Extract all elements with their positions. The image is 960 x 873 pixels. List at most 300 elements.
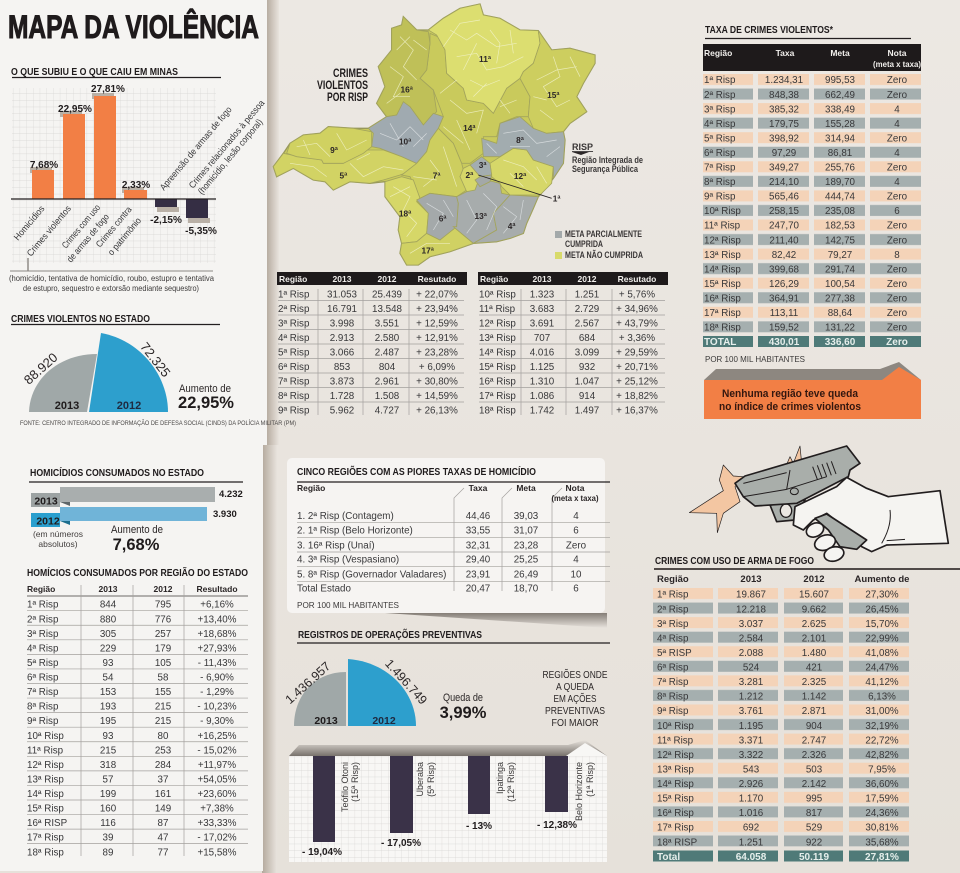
table: taxa de crimes violentos: 113,11 xyxy=(770,308,798,319)
panel: cinco regiões com as piores taxas: 39,03 xyxy=(514,511,539,522)
table: crimes violentos 10ª a 18ª Risp: 2013 xyxy=(533,274,552,284)
table: crimes com uso de arma de fogo: 3ª Risp xyxy=(657,619,689,630)
bar chart: regiões com maior queda: (5ª Risp) xyxy=(426,762,436,797)
panel: cinco regiões com as piores taxas: 23,28 xyxy=(514,540,539,551)
table: crimes violentos 1ª a 9ª Risp xyxy=(277,272,467,417)
table: crimes violentos 10ª a 18ª Risp: 2.729 xyxy=(575,304,599,315)
bar chart: homicídios consumados: 2013 xyxy=(34,496,58,508)
heading: crimes violentos no estado: CRIMES VIOLENTOS NO ESTADO xyxy=(11,313,150,325)
pie chart: operações preventivas: 2013 xyxy=(314,715,338,727)
map title: POR RISP xyxy=(327,92,368,104)
callout: queda 3,99%: Queda de xyxy=(443,692,483,704)
table: taxa de crimes violentos: 291,74 xyxy=(825,264,856,275)
bar chart: homicídios consumados: 3.930 xyxy=(213,509,237,520)
table: homicídios por região: - 9,30% xyxy=(200,716,234,727)
panel: cinco regiões com as piores taxas: Meta xyxy=(516,483,536,493)
table: crimes violentos 1ª a 9ª Risp: + 30,80% xyxy=(416,377,458,388)
table: crimes violentos 10ª a 18ª Risp: 1.086 xyxy=(530,391,555,402)
table: taxa de crimes violentos: Zero xyxy=(887,75,908,86)
table: crimes com uso de arma de fogo: 1.170 xyxy=(739,794,764,805)
table: crimes violentos 10ª a 18ª Risp: 4.016 xyxy=(530,348,555,359)
table: crimes com uso de arma de fogo: 9ª Risp xyxy=(657,706,689,717)
table: crimes com uso de arma de fogo: 421 xyxy=(806,662,822,674)
panel: cinco regiões com as piores taxas: 2. 1ª Risp (Belo Horizonte) xyxy=(297,525,413,536)
table: taxa de crimes violentos: 8ª Risp xyxy=(704,177,736,188)
table: crimes com uso de arma de fogo: 50.119 xyxy=(799,852,829,863)
table: crimes violentos 1ª a 9ª Risp: + 26,13% xyxy=(416,406,458,417)
table: crimes com uso de arma de fogo: 15.607 xyxy=(799,590,829,601)
table: taxa de crimes violentos: Zero xyxy=(887,162,908,174)
table: crimes com uso de arma de fogo: 11ª Risp xyxy=(657,735,694,746)
table: taxa de crimes violentos: 247,70 xyxy=(769,221,800,232)
table: taxa de crimes violentos: 430,01 xyxy=(769,337,800,348)
bar chart: o que subiu e o que caiu: Crimes relacionados à pessoa xyxy=(187,97,267,190)
table: crimes violentos 10ª a 18ª Risp: Região xyxy=(480,274,508,284)
table: crimes violentos 1ª a 9ª Risp: + 23,94% xyxy=(416,304,458,315)
table: crimes violentos 10ª a 18ª Risp: + 5,76% xyxy=(619,290,655,301)
map: region labels: 16ª xyxy=(400,84,414,94)
table: crimes violentos 10ª a 18ª Risp: 11ª Risp xyxy=(479,304,516,315)
table: taxa de crimes violentos: 100,54 xyxy=(825,279,856,290)
table: crimes violentos 1ª a 9ª Risp: 2ª Risp xyxy=(278,304,310,315)
table: homicídios por região: 116 xyxy=(100,818,116,829)
table: crimes com uso de arma de fogo: 35,68% xyxy=(865,837,899,848)
panel: cinco regiões com as piores taxas: 6 xyxy=(573,584,579,595)
table: crimes com uso de arma de fogo: 3.322 xyxy=(739,750,763,761)
table: taxa de crimes violentos: Zero xyxy=(887,279,908,290)
map: municipal boundary texture xyxy=(290,20,580,253)
panel: cinco regiões com as piores taxas: 29,40 xyxy=(466,555,491,566)
pie chart: crimes violentos: 2013 xyxy=(55,400,79,412)
table: homicídios por região: 39 xyxy=(103,833,113,844)
note: em números absolutos xyxy=(33,529,83,549)
table: homicídios por região: 153 xyxy=(100,687,117,698)
table: homicídios por região: 54 xyxy=(103,672,114,684)
table: homicídios por região: 6ª Risp xyxy=(27,672,59,684)
text: regiões onde a queda foi maior: A QUEDA xyxy=(556,681,594,693)
table: homicídios por região: +7,38% xyxy=(200,804,234,815)
map: region labels xyxy=(330,54,561,256)
bar chart: o que subiu e o que caiu: Apreensão de armas de fogo xyxy=(158,105,234,192)
table: taxa de crimes violentos: 12ª Risp xyxy=(704,235,741,246)
table: taxa de crimes violentos: 2ª Risp xyxy=(704,90,736,101)
panel: cinco regiões com as piores taxas: POR 100 MIL HABITANTES xyxy=(297,600,399,610)
table: taxa de crimes violentos: 662,49 xyxy=(825,90,855,101)
bar chart: regiões com maior queda: - 19,04% xyxy=(302,847,342,858)
table: crimes com uso de arma de fogo: 30,81% xyxy=(865,823,899,834)
bar chart: regiões com maior queda: (15ª Risp) xyxy=(350,762,360,802)
map: region labels: 7ª xyxy=(433,171,441,181)
table: taxa de crimes violentos: 349,27 xyxy=(769,162,799,174)
table: crimes violentos 10ª a 18ª Risp: 932 xyxy=(579,362,595,373)
table: taxa de crimes violentos: 565,46 xyxy=(769,192,800,203)
table: crimes violentos 10ª a 18ª Risp: 15ª Risp xyxy=(479,362,516,373)
table: taxa de crimes violentos: 14ª Risp xyxy=(704,264,741,275)
legend: meta: META PARCIALMENTE xyxy=(565,229,642,239)
table: crimes violentos 10ª a 18ª Risp: + 16,37% xyxy=(616,406,658,417)
table: homicídios por região: 179 xyxy=(155,643,171,654)
table: crimes com uso de arma de fogo: 9.662 xyxy=(802,604,826,615)
table: taxa de crimes violentos xyxy=(703,44,921,348)
table: crimes violentos 1ª a 9ª Risp: 853 xyxy=(334,362,351,373)
map: region labels: 3ª xyxy=(479,160,487,170)
bar chart: o que subiu e o que caiu xyxy=(10,84,267,271)
table: taxa de crimes violentos: 155,28 xyxy=(825,119,856,130)
table: homicídios por região: 47 xyxy=(158,833,168,844)
table: homicídios por região: 37 xyxy=(158,774,168,785)
table: crimes com uso de arma de fogo: 7,95% xyxy=(868,764,896,775)
callout: aumento 22,95% xyxy=(178,383,234,412)
table: crimes com uso de arma de fogo: 12.218 xyxy=(736,604,767,615)
map: region labels: 15ª xyxy=(547,90,560,100)
pie chart: operações preventivas xyxy=(283,657,430,727)
table: crimes violentos 10ª a 18ª Risp: 3.691 xyxy=(530,319,554,330)
table: taxa de crimes violentos: 9ª Risp xyxy=(704,192,736,203)
panel: cinco regiões com as piores taxas: CINCO REGIÕES COM AS PIORES TAXAS DE HOMICÍDIO xyxy=(297,465,536,478)
table: crimes com uso de arma de fogo: 6,13% xyxy=(868,692,896,703)
table: taxa de crimes violentos: 88,64 xyxy=(828,308,853,319)
table: crimes violentos 10ª a 18ª Risp: 13ª Risp xyxy=(479,333,516,344)
table: crimes violentos 10ª a 18ª Risp: 707 xyxy=(534,333,550,344)
map: region labels: 13ª xyxy=(474,211,488,221)
table: crimes violentos 10ª a 18ª Risp: 12ª Risp xyxy=(479,319,516,330)
bar chart: regiões com maior queda: - 17,05% xyxy=(381,838,421,849)
map: region labels: 10ª xyxy=(399,137,412,147)
table: taxa de crimes violentos: 1.234,31 xyxy=(765,75,803,86)
table: taxa de crimes violentos: 399,68 xyxy=(769,264,800,275)
legend: RISP definition xyxy=(572,142,643,174)
table: taxa de crimes violentos: 189,70 xyxy=(825,177,856,188)
table: taxa de crimes violentos: 214,10 xyxy=(769,177,800,188)
map: region labels: 11ª xyxy=(479,54,492,64)
panel: cinco regiões com as piores taxas: 26,49 xyxy=(514,569,538,580)
bar chart: o que subiu e o que caiu: 7,68% xyxy=(30,160,58,171)
panel: cinco regiões com as piores taxas: 10 xyxy=(571,569,582,580)
map: region labels: 4ª xyxy=(508,221,516,231)
table: crimes com uso de arma de fogo: 22,72% xyxy=(865,735,899,746)
panel: cinco regiões com as piores taxas: 5. 8ª Risp (Governador Valadares) xyxy=(297,569,446,580)
table: crimes violentos 10ª a 18ª Risp: 1.125 xyxy=(530,362,555,373)
table: homicídios por região: 229 xyxy=(100,643,116,654)
bar chart: o que subiu e o que caiu: Homicídios xyxy=(12,203,47,242)
table: taxa de crimes violentos: Meta xyxy=(830,48,850,58)
table: homicídios por região: 284 xyxy=(155,760,172,771)
table: crimes com uso de arma de fogo: 1.142 xyxy=(802,692,826,703)
panel: cinco regiões com as piores taxas: 33,55 xyxy=(466,525,491,536)
legend: RISP definition: RISP xyxy=(572,142,593,152)
table: taxa de crimes violentos: 4 xyxy=(894,104,900,115)
bar chart: o que subiu e o que caiu: Crimes com uso xyxy=(60,202,102,250)
table: taxa de crimes violentos: Zero xyxy=(887,308,908,319)
table: crimes com uso de arma de fogo: 2.625 xyxy=(802,619,827,630)
table: taxa de crimes violentos: 4 xyxy=(894,177,900,188)
table: homicídios por região: 199 xyxy=(100,789,116,800)
table: taxa de crimes violentos: 336,60 xyxy=(825,337,856,348)
table: taxa de crimes violentos: (meta x taxa) xyxy=(873,59,921,69)
table: crimes com uso de arma de fogo: 1.195 xyxy=(739,721,764,732)
table: homicídios por região: 5ª Risp xyxy=(27,658,59,669)
table: crimes violentos 1ª a 9ª Risp: 6ª Risp xyxy=(278,362,310,373)
table: crimes violentos 10ª a 18ª Risp: 684 xyxy=(579,333,596,344)
table: homicídios por região: - 10,23% xyxy=(197,702,237,713)
table: crimes com uso de arma de fogo: 2.142 xyxy=(802,779,826,790)
table: crimes violentos 1ª a 9ª Risp: + 12,59% xyxy=(416,319,458,330)
table: homicídios por região: +33,33% xyxy=(198,818,237,829)
table: crimes violentos 10ª a 18ª Risp: 18ª Risp xyxy=(479,406,516,417)
table: crimes violentos 10ª a 18ª Risp: + 34,96% xyxy=(616,304,658,315)
table: homicídios por região: 318 xyxy=(100,760,117,771)
table: crimes com uso de arma de fogo: 2ª Risp xyxy=(657,604,689,615)
table: homicídios por região: +54,05% xyxy=(198,774,237,785)
table: taxa de crimes violentos: 86,81 xyxy=(828,148,852,159)
table: crimes com uso de arma de fogo: 42,82% xyxy=(865,750,899,761)
table: crimes com uso de arma de fogo: 4ª Risp xyxy=(657,633,689,644)
table: crimes com uso de arma de fogo: 18ª RISP xyxy=(657,837,698,848)
table: homicídios por região: 160 xyxy=(100,804,117,815)
table: crimes violentos 1ª a 9ª Risp: 9ª Risp xyxy=(278,406,310,417)
table: homicídios por região: 11ª Risp xyxy=(27,745,64,756)
table: crimes violentos 10ª a 18ª Risp: + 25,12% xyxy=(616,377,658,388)
table: crimes com uso de arma de fogo: 692 xyxy=(743,823,759,834)
pie chart: crimes violentos: 88.920 xyxy=(21,350,60,388)
table: crimes violentos 10ª a 18ª Risp: 14ª Risp xyxy=(479,348,516,359)
table: homicídios por região: +15,58% xyxy=(198,847,237,858)
table: crimes violentos 1ª a 9ª Risp: 2013 xyxy=(333,274,352,284)
table: taxa de crimes violentos: 97,29 xyxy=(772,148,796,159)
table: taxa de crimes violentos: 10ª Risp xyxy=(704,206,741,217)
table: homicídios por região: 93 xyxy=(103,658,114,669)
table: crimes violentos 1ª a 9ª Risp: 8ª Risp xyxy=(278,391,310,402)
table: homicídios por região: 2013 xyxy=(99,584,118,594)
bar chart: o que subiu e o que caiu: o patrimônio xyxy=(106,216,143,257)
table: crimes com uso de arma de fogo: 2012 xyxy=(803,574,825,585)
table: homicídios por região: 195 xyxy=(100,716,117,727)
table: homicídios por região: 7ª Risp xyxy=(27,687,59,698)
table: homicídios por região: +16,25% xyxy=(198,731,237,742)
table: crimes violentos 10ª a 18ª Risp: 17ª Risp xyxy=(479,391,516,402)
table: taxa de crimes violentos: 4ª Risp xyxy=(704,119,736,130)
heading: o que subiu: O QUE SUBIU E O QUE CAIU EM MINAS xyxy=(11,66,178,78)
table: homicídios por região: 57 xyxy=(103,774,113,785)
table: crimes violentos 1ª a 9ª Risp: 3ª Risp xyxy=(278,319,310,330)
panel: cinco regiões com as piores taxas: Zero xyxy=(566,540,587,551)
table: taxa de crimes violentos: Zero xyxy=(887,294,908,304)
table: crimes com uso de arma de fogo: 8ª Risp xyxy=(657,692,689,703)
table: crimes com uso de arma de fogo: 543 xyxy=(743,764,760,775)
table: homicídios por região: 17ª Risp xyxy=(27,833,64,844)
table: crimes com uso de arma de fogo: 5ª RISP xyxy=(657,648,692,659)
table: homicídios por região: 1ª Risp xyxy=(27,600,59,611)
map: region labels: 17ª xyxy=(421,246,435,256)
note: em números absolutos: (em números xyxy=(33,529,83,539)
table: crimes com uso de arma de fogo: 31,00% xyxy=(865,706,899,717)
table: taxa de crimes violentos: Região xyxy=(704,48,732,58)
table: homicídios por região: +27,93% xyxy=(198,643,237,654)
table: homicídios por região: - 11,43% xyxy=(198,658,237,669)
table: crimes violentos 10ª a 18ª Risp: 2.567 xyxy=(575,319,599,330)
table: crimes com uso de arma de fogo: 24,47% xyxy=(865,662,899,674)
map title: VIOLENTOS xyxy=(317,80,368,92)
map: region labels: 6ª xyxy=(439,213,447,223)
table: homicídios por região: - 15,02% xyxy=(197,745,237,756)
table: homicídios por região: - 6,90% xyxy=(200,672,234,684)
table: crimes com uso de arma de fogo: 904 xyxy=(806,721,823,732)
table: crimes violentos 1ª a 9ª Risp: 1.728 xyxy=(330,391,355,402)
map: crimes violentos por RISP xyxy=(273,4,595,265)
table: crimes violentos 10ª a 18ª Risp: Resutado xyxy=(618,274,656,284)
bar chart: o que subiu e o que caiu: -2,15% xyxy=(150,215,182,226)
text: regiões onde a queda foi maior: PREVENTIVAS xyxy=(545,705,605,717)
map: region labels: 8ª xyxy=(516,135,525,145)
table: crimes violentos 10ª a 18ª Risp: + 43,79% xyxy=(616,319,658,330)
table: homicídios por região: 215 xyxy=(155,716,172,727)
bar chart: o que subiu e o que caiu: -5,35% xyxy=(185,226,217,237)
bar chart: regiões com maior queda: Ipatinga xyxy=(495,762,505,794)
legend: RISP definition: Segurança Pública xyxy=(572,164,639,174)
table: homicídios por região: +11,97% xyxy=(198,760,236,771)
table: crimes com uso de arma de fogo: 3.371 xyxy=(739,735,763,746)
table: homicídios por região: 87 xyxy=(158,818,168,829)
bar chart: o que subiu e o que caiu: Crimes violentos xyxy=(25,203,73,258)
bar chart: o que subiu e o que caiu: 2,33% xyxy=(122,180,150,191)
table: crimes violentos 1ª a 9ª Risp: 1ª Risp xyxy=(278,290,310,301)
table: taxa de crimes violentos: 142,75 xyxy=(825,235,856,246)
table: homicídios por região: 155 xyxy=(155,687,172,698)
text: regiões onde a queda foi maior: REGIÕES ONDE xyxy=(542,668,608,681)
table: homicídios por região: 2012 xyxy=(154,584,173,594)
table: homicídios por região: 149 xyxy=(155,804,171,815)
table: crimes violentos 1ª a 9ª Risp: + 22,07% xyxy=(416,290,458,301)
icon: hand firing gun xyxy=(689,446,948,563)
table: crimes violentos 1ª a 9ª Risp: 4.727 xyxy=(375,406,399,417)
table: crimes violentos 10ª a 18ª Risp: 16ª Risp xyxy=(479,377,516,388)
table: crimes com uso de arma de fogo: 2.747 xyxy=(802,735,826,746)
callout: queda 3,99% xyxy=(440,692,487,722)
callout: aumento 7,68%: 7,68% xyxy=(113,536,160,554)
panel: cinco regiões com as piores taxas: 25,25 xyxy=(514,555,539,566)
table: taxa de crimes violentos: 7ª Risp xyxy=(704,162,736,174)
table: taxa de crimes violentos: Zero xyxy=(887,192,908,203)
table: crimes com uso de arma de fogo: 13ª Risp xyxy=(657,764,694,775)
heading: homicídios consumados no estado: HOMICÍDIOS CONSUMADOS NO ESTADO xyxy=(30,466,204,479)
note: em números absolutos: absolutos) xyxy=(38,539,78,549)
table: crimes violentos 1ª a 9ª Risp: 4ª Risp xyxy=(278,333,310,344)
table: taxa de crimes violentos: 385,32 xyxy=(769,104,799,115)
table: crimes com uso de arma de fogo: 1ª Risp xyxy=(657,590,689,601)
table: crimes violentos 10ª a 18ª Risp xyxy=(478,272,668,417)
table: crimes com uso de arma de fogo: 19.867 xyxy=(736,590,766,601)
panel: cinco regiões com as piores taxas: 20,47 xyxy=(466,584,490,595)
table: crimes violentos 1ª a 9ª Risp: 31.053 xyxy=(327,290,358,301)
table: crimes violentos 10ª a 18ª Risp: 2012 xyxy=(578,274,597,284)
table: crimes violentos 1ª a 9ª Risp: 2.487 xyxy=(375,348,399,359)
table: crimes violentos 1ª a 9ª Risp: + 14,59% xyxy=(416,391,458,402)
table: homicídios por região: 9ª Risp xyxy=(27,716,59,727)
table: homicídios por região: 105 xyxy=(155,658,172,669)
bar chart: regiões com maior queda: Belo Horizonte xyxy=(574,762,584,821)
table: taxa de crimes violentos: 131,22 xyxy=(825,323,855,334)
table: homicídios por região: 215 xyxy=(100,745,117,756)
pie chart: operações preventivas: 1.436.957 xyxy=(283,659,333,707)
map: region labels: 12ª xyxy=(514,171,527,181)
table: crimes com uso de arma de fogo: 3.037 xyxy=(739,619,763,630)
table: crimes com uso de arma de fogo: 41,12% xyxy=(865,677,899,688)
table: crimes com uso de arma de fogo: 2.871 xyxy=(802,706,826,717)
table: homicídios por região: 880 xyxy=(100,614,117,625)
bar chart: regiões com maior queda xyxy=(289,740,607,862)
map: region labels: 14ª xyxy=(463,123,476,133)
panel: cinco regiões com as piores taxas: 31,07 xyxy=(514,525,538,536)
bar chart: o que subiu e o que caiu: 22,95% xyxy=(58,104,92,115)
table: crimes violentos 1ª a 9ª Risp: 2.580 xyxy=(375,333,400,344)
table: homicídios por região: 16ª RISP xyxy=(27,818,68,829)
table: crimes com uso de arma de fogo: 2.325 xyxy=(802,677,827,688)
table: crimes violentos 1ª a 9ª Risp: 5ª Risp xyxy=(278,348,310,359)
table: crimes com uso de arma de fogo: 3.281 xyxy=(739,677,763,688)
table: homicídios por região: 58 xyxy=(158,672,169,684)
heading: taxa de crimes violentos: TAXA DE CRIMES VIOLENTOS* xyxy=(705,24,834,36)
table: crimes violentos 1ª a 9ª Risp: 3.551 xyxy=(375,319,399,330)
table: crimes com uso de arma de fogo: 36,60% xyxy=(865,779,899,790)
table: homicídios por região: +23,60% xyxy=(198,789,237,800)
note: crimes violentos definition: (homicídio, tentativa de homicídio, roubo, estupro e tentativa xyxy=(9,273,214,283)
table: crimes com uso de arma de fogo: 17,59% xyxy=(865,794,899,805)
table: crimes com uso de arma de fogo: 12ª Risp xyxy=(657,750,694,761)
table: crimes com uso de arma de fogo: 1.212 xyxy=(739,692,763,703)
panel: cinco regiões com as piores taxas: Região xyxy=(297,483,325,493)
table: crimes violentos 1ª a 9ª Risp: 5.962 xyxy=(330,406,354,417)
table: taxa de crimes violentos: Zero xyxy=(887,221,908,232)
table: taxa de crimes violentos: Zero xyxy=(887,235,908,246)
map: region labels: 2ª xyxy=(465,170,474,180)
table: crimes com uso de arma de fogo: 2.088 xyxy=(739,648,764,659)
table: crimes violentos 10ª a 18ª Risp: 1.742 xyxy=(530,406,554,417)
table: crimes com uso de arma de fogo: Aumento de xyxy=(855,574,909,585)
callout: nenhuma região teve queda: Nenhuma região teve queda xyxy=(722,388,859,400)
table: crimes violentos 1ª a 9ª Risp: 13.548 xyxy=(372,304,403,315)
table: homicídios por região: 305 xyxy=(100,629,117,640)
panel: cinco regiões com as piores taxas: Taxa xyxy=(469,483,488,493)
pie chart: operações preventivas: 2012 xyxy=(372,715,396,727)
table: crimes violentos 10ª a 18ª Risp: 1.323 xyxy=(530,290,555,301)
table: taxa de crimes violentos: 159,52 xyxy=(769,323,799,334)
table: homicídios por região: 3ª Risp xyxy=(27,629,59,640)
bar chart: regiões com maior queda: - 12,38% xyxy=(537,820,577,831)
panel: cinco regiões com as piores taxas: 4 xyxy=(573,555,579,566)
table: taxa de crimes violentos: 126,29 xyxy=(769,279,799,290)
map: region labels: 1ª xyxy=(553,193,561,203)
map: region labels: 18ª xyxy=(399,208,412,218)
table: crimes com uso de arma de fogo: 2.326 xyxy=(802,750,827,761)
bar chart: o que subiu e o que caiu: de armas de fogo xyxy=(65,212,111,264)
table: crimes violentos 10ª a 18ª Risp: 3.683 xyxy=(530,304,555,315)
table: crimes com uso de arma de fogo: 22,99% xyxy=(865,633,899,644)
table: crimes com uso de arma de fogo: 26,45% xyxy=(865,604,899,615)
callout: nenhuma região teve queda: no índice de crimes violentos xyxy=(719,401,861,413)
table: homicídios por região: 795 xyxy=(155,600,172,611)
bar chart: regiões com maior queda: Teófilo Otoni xyxy=(340,762,350,812)
table: crimes violentos 10ª a 18ª Risp: + 29,59% xyxy=(616,348,658,359)
table: crimes violentos 1ª a 9ª Risp: 1.508 xyxy=(375,391,400,402)
table: crimes violentos 10ª a 18ª Risp: + 20,71% xyxy=(616,362,658,373)
table: taxa de crimes violentos: 1ª Risp xyxy=(704,75,736,86)
callout: aumento 7,68%: Aumento de xyxy=(111,524,163,536)
bar chart: regiões com maior queda: Uberaba xyxy=(415,762,425,797)
table: crimes violentos 1ª a 9ª Risp: 25.439 xyxy=(372,290,402,301)
panel: cinco regiões com as piores taxas: 32,31 xyxy=(466,540,490,551)
table: crimes com uso de arma de fogo: 24,36% xyxy=(865,808,899,819)
table: taxa de crimes violentos: 211,40 xyxy=(769,235,799,246)
